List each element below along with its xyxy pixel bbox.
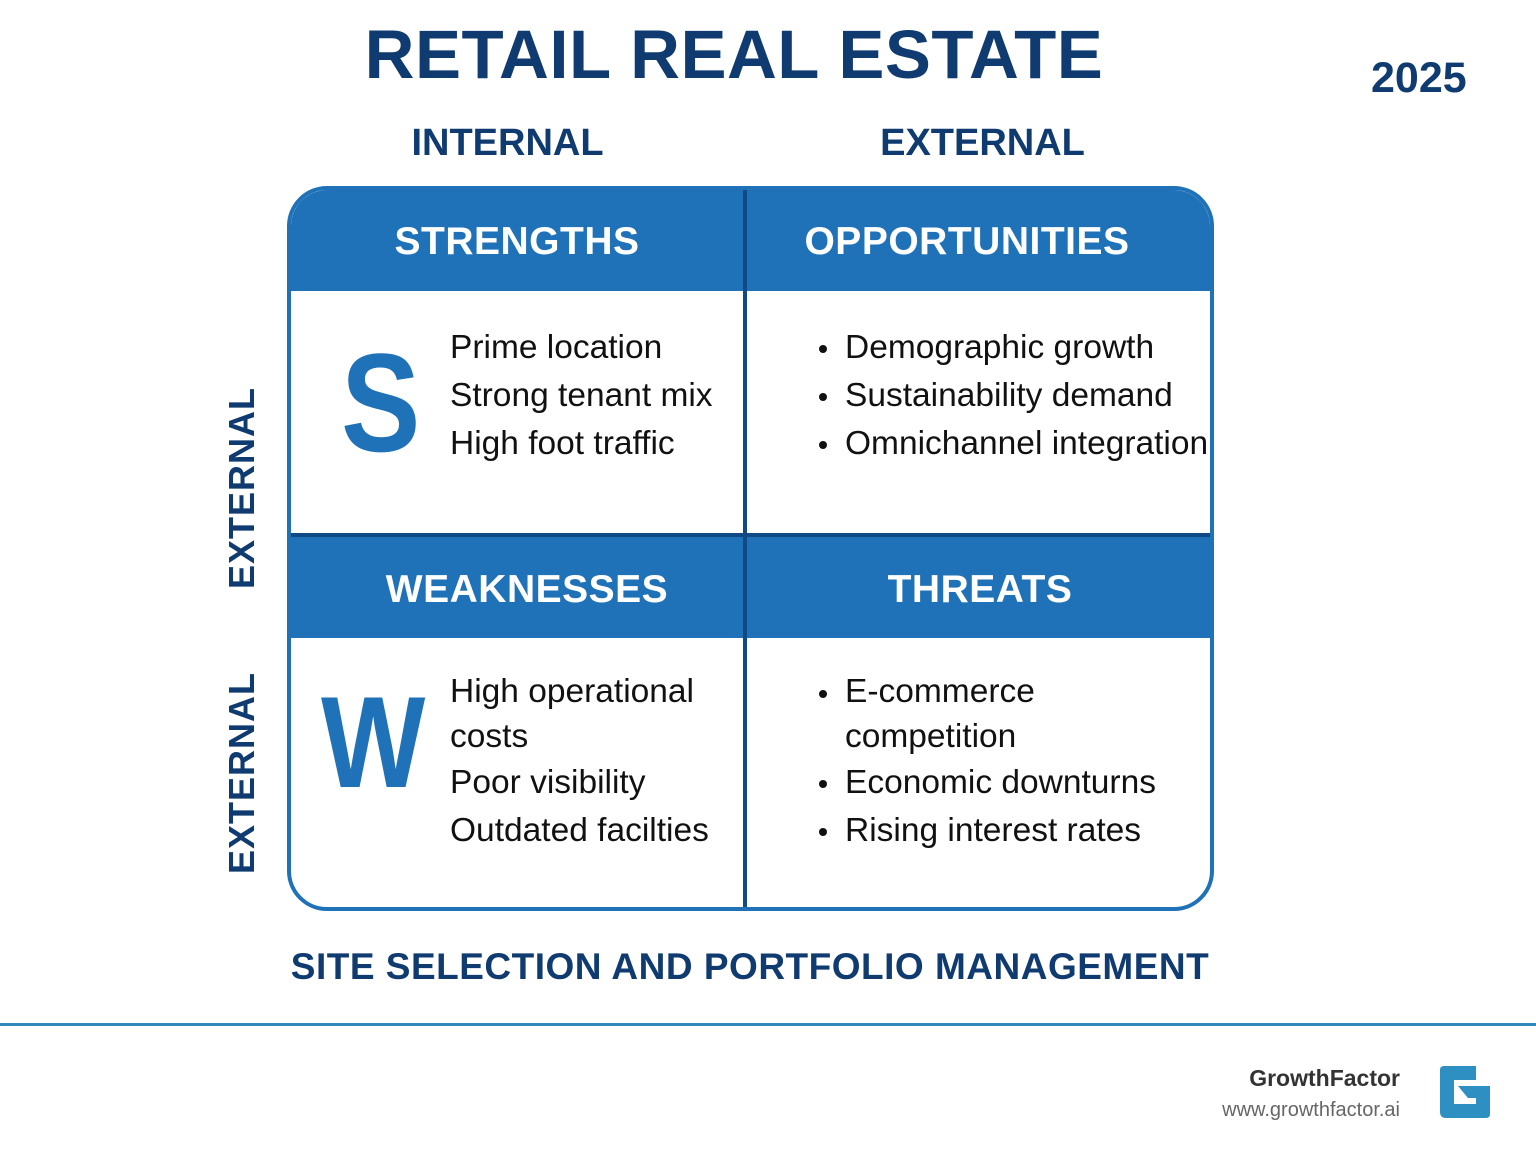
- list: threats: competition: [845, 718, 1016, 755]
- panel: weaknesses: [321, 568, 709, 849]
- list: opportunities: [819, 329, 1208, 462]
- heading: opportunities: OPPORTUNITIES: [804, 220, 1130, 263]
- list: weaknesses: Poor visibility: [450, 764, 645, 801]
- title: RETAIL REAL ESTATE: [365, 16, 1103, 93]
- column label: internal: INTERNAL: [411, 122, 604, 164]
- icon: S: S: [341, 324, 420, 481]
- list: threats: [819, 673, 1156, 849]
- list: strengths: High foot traffic: [450, 425, 675, 462]
- list: weaknesses: costs: [450, 718, 528, 755]
- list: weaknesses: Outdated facilties: [450, 812, 709, 849]
- list: opportunities: Sustainability demand: [845, 377, 1173, 414]
- heading: weaknesses: WEAKNESSES: [386, 568, 668, 611]
- brand name: GrowthFactor: [1249, 1065, 1400, 1091]
- list: strengths: Prime location: [450, 329, 662, 366]
- list: strengths: [450, 329, 713, 462]
- heading: strengths: STRENGTHS: [394, 220, 640, 263]
- list: opportunities: Demographic growth: [845, 329, 1154, 366]
- heading: threats: THREATS: [888, 568, 1072, 611]
- list: opportunities: Omnichannel integration: [845, 425, 1208, 462]
- icon: logo: [1440, 1066, 1490, 1118]
- panel: threats: [819, 568, 1156, 849]
- panel: opportunities: [804, 220, 1208, 462]
- list: weaknesses: High operational: [450, 673, 694, 710]
- icon: W: W: [321, 669, 425, 815]
- list: weaknesses: [450, 673, 709, 849]
- list: strengths: Strong tenant mix: [450, 377, 713, 414]
- subtitle: SITE SELECTION AND PORTFOLIO MANAGEMENT: [291, 946, 1209, 987]
- column label: external: EXTERNAL: [880, 122, 1085, 164]
- SWOT grid: [287, 186, 1214, 911]
- row label: external bottom: EXTERNAL: [221, 672, 262, 874]
- year: 2025: [1371, 54, 1467, 102]
- list: threats: Economic downturns: [845, 764, 1156, 801]
- list: threats: E-commerce: [845, 673, 1035, 710]
- list: threats: Rising interest rates: [845, 812, 1141, 849]
- brand url: www.growthfactor.ai: [1222, 1099, 1400, 1121]
- panel: strengths: [341, 220, 713, 481]
- row label: external top: EXTERNAL: [221, 387, 262, 589]
